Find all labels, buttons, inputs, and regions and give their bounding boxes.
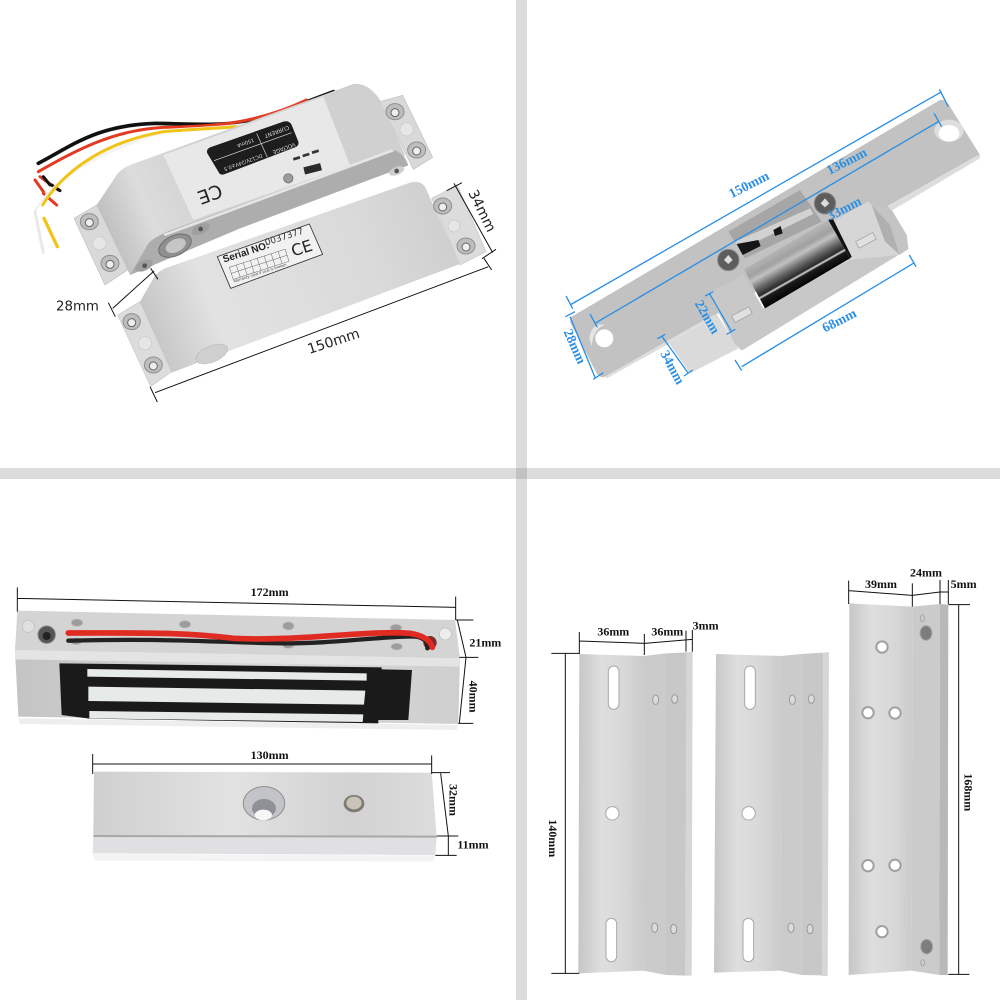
armature pin bbox=[344, 795, 364, 812]
keeper pocket bbox=[835, 202, 898, 260]
bracket left bbox=[578, 652, 693, 976]
blue dimension labels: 136mm bbox=[824, 144, 870, 178]
black dimension lines bbox=[17, 587, 478, 855]
end cap with button bbox=[133, 164, 406, 274]
lower end vent bbox=[193, 340, 230, 368]
panel: electric strike bbox=[561, 89, 980, 387]
magnet shadow bbox=[18, 718, 458, 730]
upper lock side face bbox=[130, 150, 408, 275]
upper lock textured band bbox=[323, 84, 405, 165]
latch cylinder bbox=[744, 220, 850, 308]
bracket dimension labels: 24mm bbox=[910, 566, 942, 580]
serial number label: 0037377 bbox=[264, 227, 305, 249]
mounting holes bbox=[589, 120, 964, 347]
serial number label: Serial NO: bbox=[222, 240, 271, 266]
dimensions: 28mm bbox=[56, 300, 99, 315]
lower lock screw holes bbox=[123, 198, 475, 373]
certification mark: CE bbox=[194, 179, 225, 207]
bracket dimension lines bbox=[551, 580, 970, 974]
screws bbox=[718, 193, 836, 271]
dimensions: 150mm bbox=[306, 326, 362, 358]
magnet front face bbox=[15, 650, 460, 724]
blue dimension labels: 150mm bbox=[726, 168, 772, 201]
panel: drop bolt lock bbox=[35, 84, 499, 402]
black voltage and current label: DC12V/24V±0.5 bbox=[223, 152, 263, 172]
upper lock sticker bbox=[163, 97, 350, 220]
black dimension labels: 11mm bbox=[457, 838, 489, 852]
keeper slots bbox=[732, 233, 876, 322]
black voltage and current label: VOLTAGE bbox=[271, 141, 296, 155]
panel: mounting brackets bbox=[546, 566, 977, 976]
black dimension labels: 32mm bbox=[447, 784, 461, 816]
upper lock flanges bbox=[74, 95, 433, 285]
lower lip bbox=[663, 303, 738, 373]
bracket dimension labels: 5mm bbox=[951, 577, 977, 591]
blue dimension labels: 33mm bbox=[825, 193, 864, 223]
black dimension labels: 130mm bbox=[251, 748, 289, 762]
black dimension labels bbox=[251, 585, 501, 852]
switches and markings bbox=[284, 151, 322, 183]
coil potting bbox=[59, 663, 412, 723]
black dimension labels: 172mm bbox=[251, 585, 289, 599]
armature plate top bbox=[93, 772, 437, 837]
bracket middle bbox=[714, 652, 829, 976]
upper lock screw holes bbox=[80, 104, 426, 271]
lower lock body bbox=[140, 182, 460, 373]
blue dimension lines bbox=[565, 89, 948, 379]
panel: magnetic lock bbox=[15, 585, 501, 862]
armature shadow bbox=[93, 854, 435, 862]
strike plate bbox=[570, 100, 980, 377]
bracket dimension labels: 36mm bbox=[651, 625, 683, 639]
blue dimension labels: 28mm bbox=[561, 327, 589, 367]
mounting screws bbox=[22, 619, 451, 650]
cable entry bbox=[38, 626, 437, 649]
bracket right bbox=[849, 603, 948, 975]
black voltage and current label: CURRENT bbox=[263, 124, 290, 138]
bracket dimension labels: 168mm bbox=[961, 773, 975, 811]
serial number label: CE bbox=[289, 236, 315, 260]
dimensions bbox=[56, 183, 499, 402]
black dimension labels: 40mm bbox=[467, 681, 481, 713]
armature plate side bbox=[93, 836, 437, 855]
bracket dimension labels: 140mm bbox=[546, 819, 560, 857]
wires bbox=[35, 92, 333, 253]
keeper box bbox=[708, 202, 908, 351]
black voltage and current label: 150mA bbox=[235, 136, 255, 148]
red and black cable bbox=[68, 633, 432, 648]
bracket dimension labels bbox=[546, 566, 977, 857]
black dimension labels: 21mm bbox=[469, 636, 501, 650]
blue dimension labels: 68mm bbox=[820, 305, 859, 335]
strike opening bbox=[728, 190, 822, 258]
armature bolt bbox=[243, 787, 285, 820]
dimensions: 34mm bbox=[464, 187, 499, 235]
magnet top face bbox=[15, 611, 460, 658]
bracket dimension labels: 3mm bbox=[693, 619, 719, 633]
serial number label bbox=[217, 224, 323, 288]
magnet core strips bbox=[87, 669, 367, 722]
blue dimension labels bbox=[561, 144, 870, 387]
bracket dimension labels: 39mm bbox=[865, 577, 897, 591]
lower lock flanges bbox=[118, 185, 486, 387]
blue dimension labels: 22mm bbox=[692, 297, 723, 337]
upper lock body bbox=[97, 84, 408, 275]
blue dimension labels: 34mm bbox=[657, 348, 688, 387]
black voltage and current label bbox=[207, 121, 299, 175]
serial number label: Warranty void if seal is broken bbox=[233, 263, 287, 284]
bracket dimension labels: 36mm bbox=[597, 625, 629, 639]
